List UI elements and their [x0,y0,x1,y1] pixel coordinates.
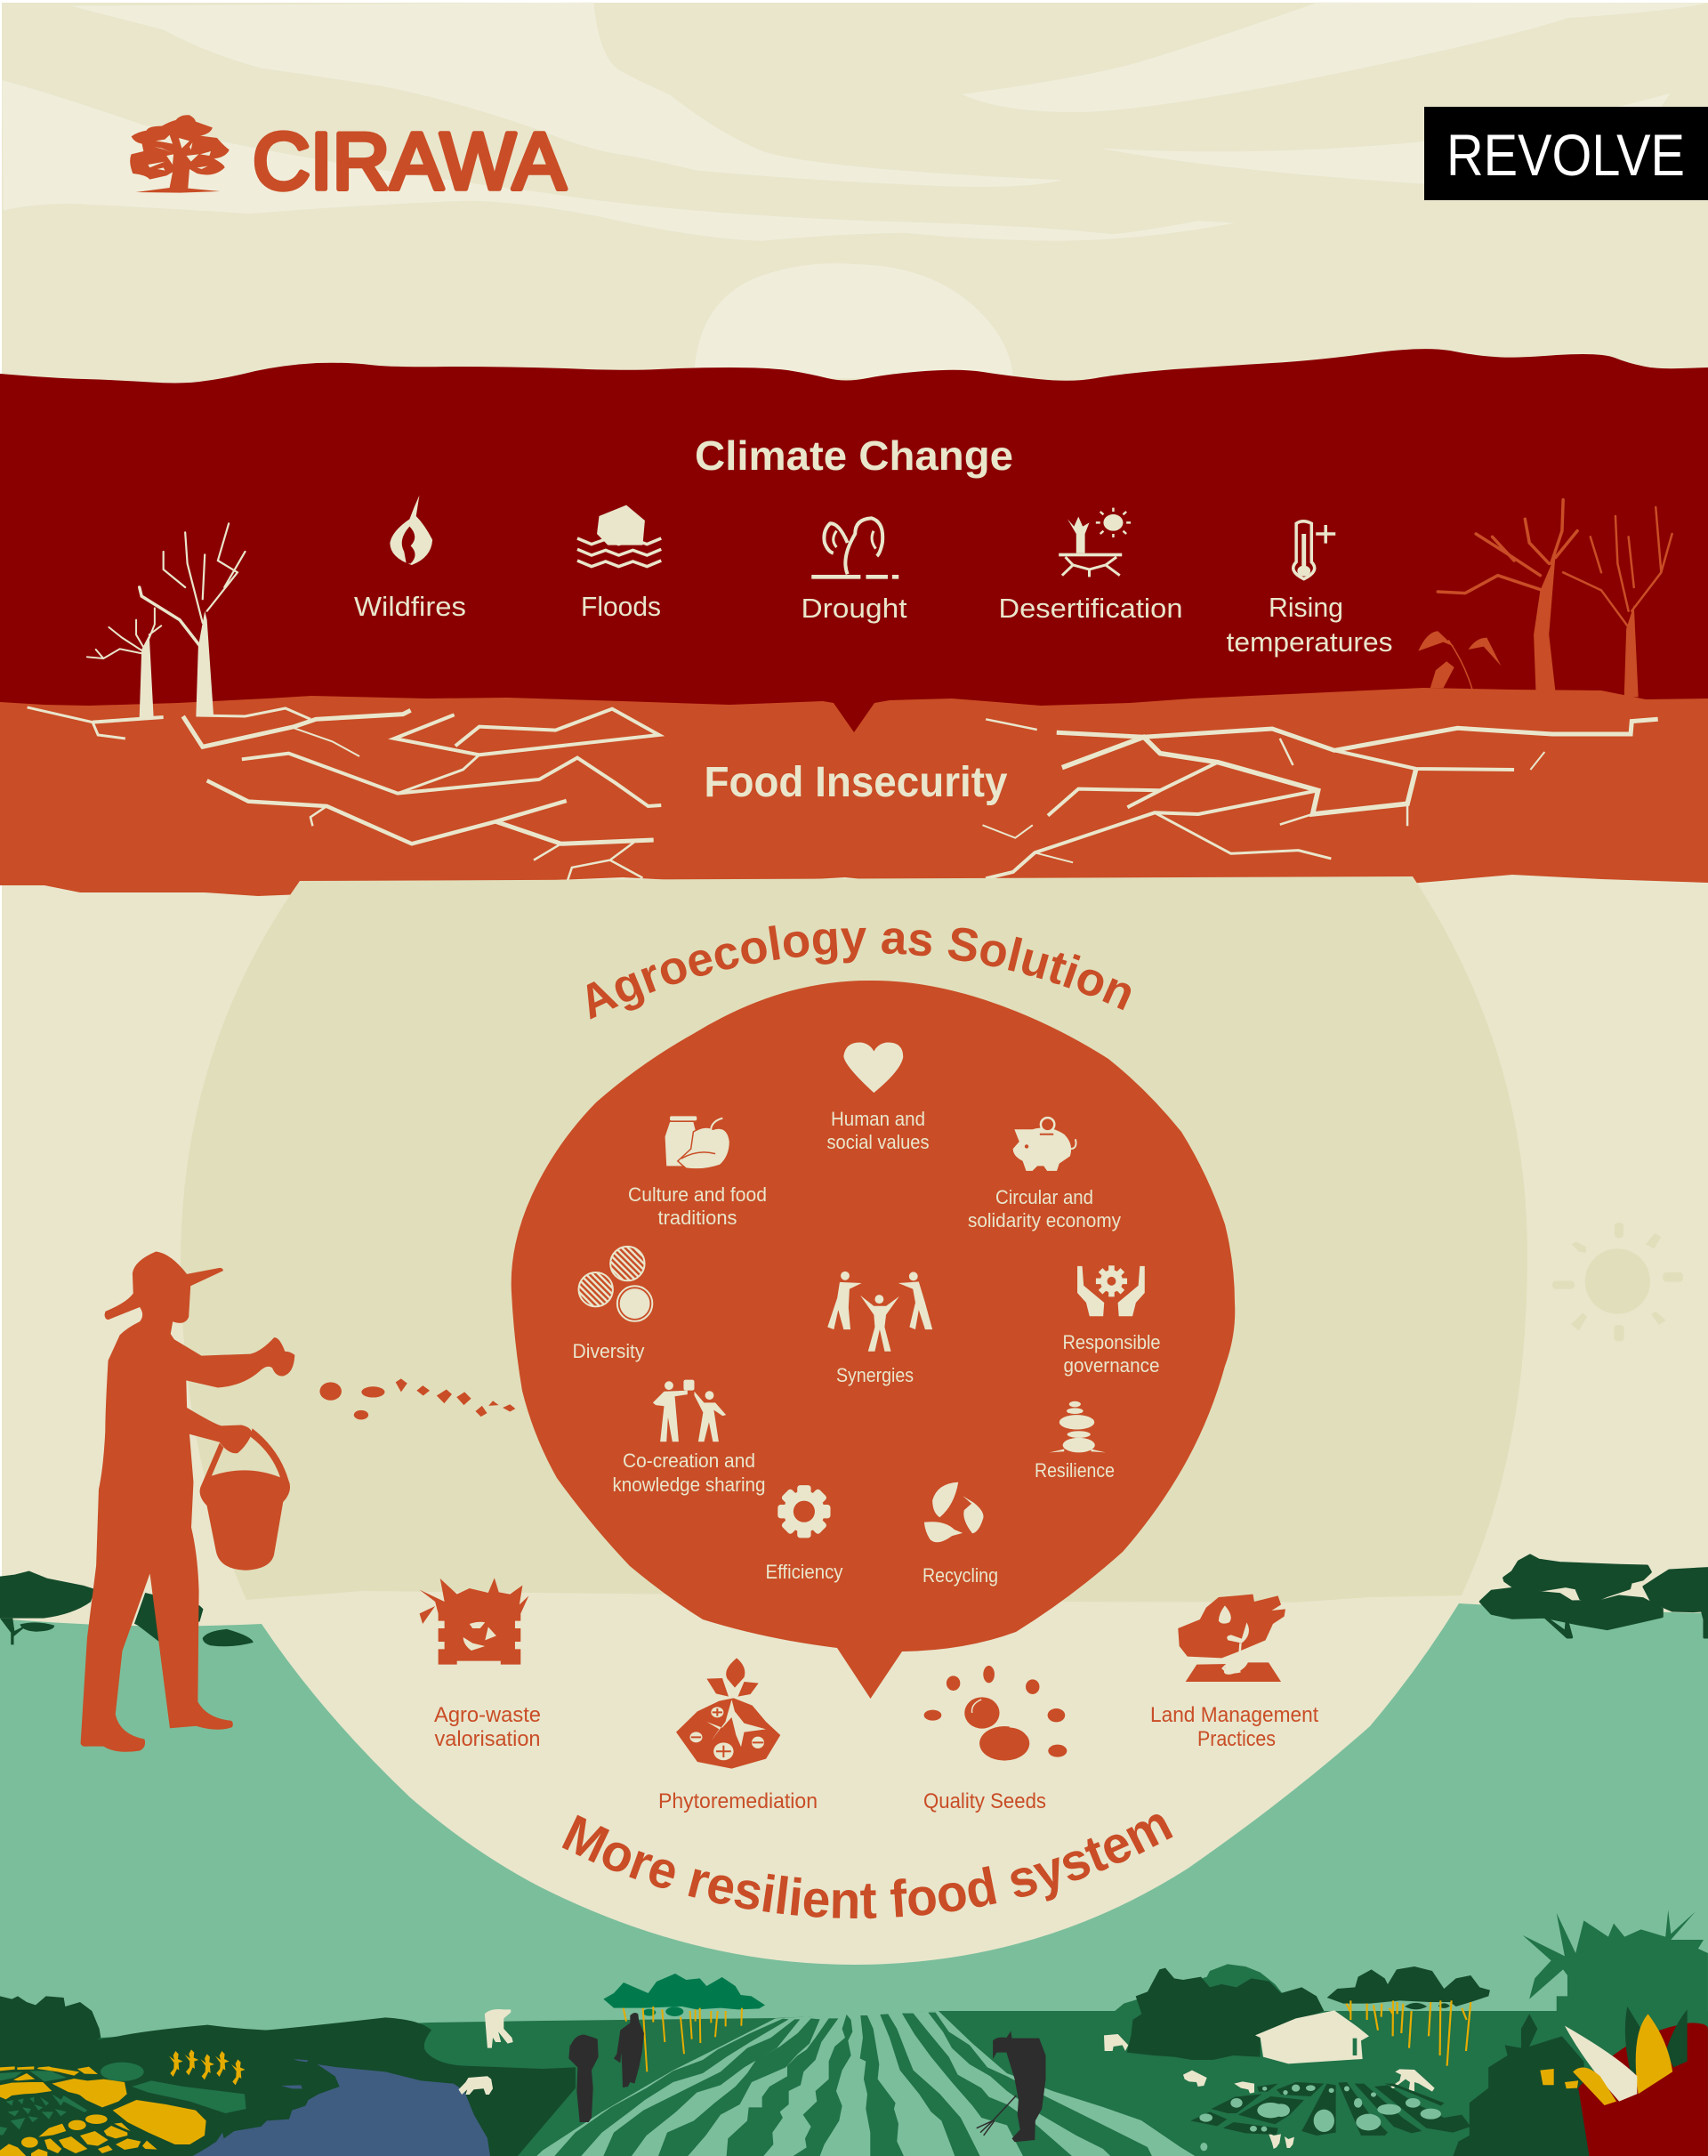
label: temperatures [1226,626,1393,658]
heading: Food Insecurity: Food Insecurity [705,759,1008,806]
illustration: farmland base [0,2011,1708,2156]
figure: man walking [614,2013,644,2087]
yellow trunks [1346,2000,1470,2066]
label: Synergies [836,1364,914,1386]
red basket [1578,2023,1708,2156]
principle: efficiency [765,1485,843,1583]
hazard: drought [801,518,907,624]
river [193,2064,490,2156]
heading: CIRAWA: CIRAWA [253,117,566,206]
hazard: desertification [998,508,1183,624]
hazard: wildfires [354,496,466,622]
small canopies [1405,2003,1450,2009]
illustration: ground cracks left [28,707,661,884]
label: Recycling [922,1564,998,1587]
icon: hand with seedling [1178,1595,1285,1682]
principle: circular and solidarity economy [968,1118,1121,1231]
icon: compost bin [420,1578,528,1665]
illustration: farmer sowing seeds [81,1252,515,1752]
practice: quality seeds [923,1666,1067,1813]
illustration: acacia trees left [0,1571,254,1646]
icon: thermometer [1293,521,1335,579]
label: Resilience [1035,1459,1115,1482]
icon: flame [390,496,432,565]
label: Agro-waste [434,1703,541,1727]
label: Efficiency [765,1561,843,1583]
label: Human and [831,1108,925,1130]
illustration: ploughed field stripes [536,1974,1195,2156]
dark furrows [554,2013,1152,2156]
green patches [0,2063,246,2135]
label: Phytoremediation [658,1789,818,1813]
house door [1353,2039,1357,2055]
label: Diversity [573,1340,644,1362]
icons and labels: agroecology principles [573,1043,1160,1587]
tree row with yellow trunks [603,1974,765,2071]
label: Co-creation and [623,1449,755,1472]
icon: cracked ground with sun [1059,508,1131,577]
illustration: bare trees left [87,523,246,717]
cream animals [1104,2034,1294,2149]
label: Drought [801,593,907,624]
illustration: farmer with fork [977,2031,1045,2142]
tree canopy [1327,1966,1490,2007]
principle: human and social values [827,1043,929,1153]
icon: jar and apple [665,1116,730,1169]
large leafy plant [1523,1910,1708,2011]
label: traditions [658,1207,737,1229]
label: Desertification [998,593,1183,624]
icon: flooded house [577,505,661,567]
panel: green hillside with resilient food system lobe [0,1603,1708,2156]
icon: hands holding gear [1077,1265,1145,1316]
icon: two people sharing [653,1380,726,1441]
principle: resilience [1035,1401,1115,1482]
river ponds [281,2059,309,2088]
panel: sky [0,0,1708,1584]
principle: co-creation and knowledge sharing [612,1380,765,1496]
illustration: ground cracks right [982,719,1658,878]
mound [1115,1964,1310,2011]
icon: plant on soil [676,1658,780,1769]
icon: three circles [579,1247,652,1321]
icon: piggy bank [1013,1118,1076,1171]
practice: phytoremediation [658,1658,818,1813]
vegetable garden plots [1190,2082,1470,2136]
icon: three people [827,1272,932,1352]
figure: scattered seeds [319,1378,515,1419]
logo: REVOLVE [1424,107,1708,200]
icon: seeds [924,1666,1067,1761]
icon: heart [843,1043,903,1093]
hazard: rising temperatures [1226,521,1393,658]
figure: cream farmer and cow by the river [458,2009,513,2095]
figure: farmer [81,1252,294,1752]
practices: orange icons and labels [420,1578,1318,1813]
light field [536,2011,1195,2156]
icon: three leaves [924,1482,984,1542]
principle: diversity [573,1247,652,1362]
practice: agro-waste valorisation [420,1578,541,1751]
illustration: bare trees right [1418,500,1672,697]
practice: land management practices [1150,1595,1318,1751]
illustration: homestead [1104,1964,1490,2151]
icon: wilted plant [811,518,898,579]
label: valorisation [434,1727,541,1751]
label: Culture and food [628,1183,767,1206]
panel: food insecurity band [0,688,1708,896]
logo: CIRAWA [130,115,566,206]
icon: stacked stones [1050,1401,1106,1452]
icon: tree logo [130,115,230,193]
farmhouse [1255,2010,1369,2063]
label: governance [1064,1354,1160,1377]
principle: synergies [827,1272,932,1386]
principle: culture and food traditions [628,1116,767,1229]
label: Wildfires [354,591,466,622]
figure: woman carrying basket [568,2035,599,2122]
corn plants [169,2049,246,2085]
icon: faint sun [1552,1223,1683,1341]
hazard: floods [577,505,661,622]
dark vine plant [1453,2014,1589,2156]
label: Circular and [995,1186,1093,1208]
principle: recycling [922,1482,998,1587]
label: Rising [1269,592,1343,623]
label: social values [827,1131,929,1153]
heading: More resilient food system: More resilient food system [562,1814,1172,1918]
label: Quality Seeds [923,1789,1046,1813]
label: knowledge sharing [612,1474,765,1496]
label: Practices [1197,1727,1276,1751]
label: Responsible [1062,1331,1160,1353]
label: solidarity economy [968,1209,1121,1231]
panel: speech bubble of agroecology principles [512,981,1235,1699]
vegetables [1199,2085,1441,2151]
heading: Climate Change: Climate Change [695,432,1013,479]
principle: responsible governance [1062,1265,1160,1377]
leafy bush [1127,1968,1324,2060]
label: Land Management [1150,1703,1318,1727]
label: Floods [581,591,661,622]
illustration: left riverbank farmland [0,1996,576,2156]
panel: climate change band [0,349,1708,739]
icon: gear [777,1485,831,1538]
panel: agroecology circle [181,876,1527,1603]
heading: Agroecology as Solution: Agroecology as Solution [587,925,1132,1020]
dark hill [0,2017,576,2156]
illustration: acacia trees right [1480,1555,1708,1637]
yellow crops [0,2066,206,2156]
illustration: right foliage and basket [1453,1910,1708,2156]
figure: bucket [200,1428,290,1571]
gardener [1385,2069,1435,2094]
tree line [0,1996,101,2047]
corn and vegetables [1540,2007,1688,2105]
